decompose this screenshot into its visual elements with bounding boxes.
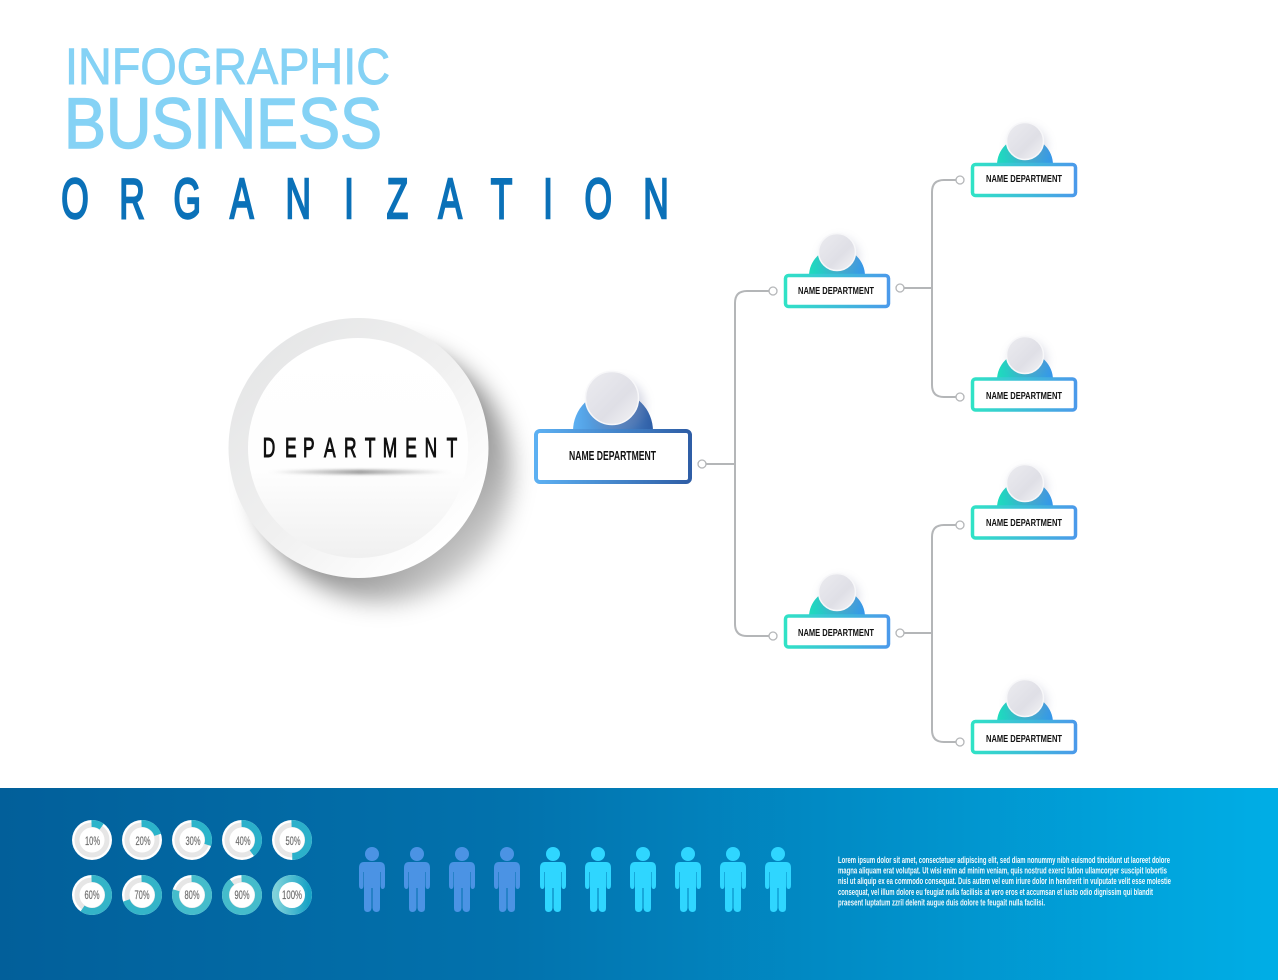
- node: upper middle: [786, 234, 888, 306]
- heading: business: BUSINESS: [64, 85, 382, 164]
- donut 50%: 50%: [286, 834, 301, 848]
- donut 20%: 20%: [136, 834, 151, 848]
- node: right 4: NAME DEPARTMENT: [986, 733, 1062, 745]
- donut 30%: [172, 820, 212, 860]
- person 8: [675, 847, 701, 912]
- percentage donuts: [72, 820, 312, 915]
- donut 70%: [122, 875, 162, 915]
- donut 60%: [72, 875, 112, 915]
- donut 10%: 10%: [85, 834, 100, 848]
- person 6: [585, 847, 611, 912]
- node: lower middle: [786, 574, 888, 647]
- person 3: [449, 847, 475, 912]
- node: right 3: [972, 464, 1076, 538]
- donut 10%: [72, 820, 112, 860]
- person 7: [630, 847, 656, 912]
- main node: [536, 372, 690, 482]
- donut 100%: 100%: [282, 888, 302, 902]
- person 1: [359, 847, 385, 912]
- donut 100%: [272, 875, 312, 915]
- node: upper middle: NAME DEPARTMENT: [798, 285, 874, 297]
- people pictogram: [359, 847, 791, 912]
- node: right 4: [972, 680, 1076, 752]
- bottom band: [0, 788, 1278, 980]
- person 2: [404, 847, 430, 912]
- donut 70%: 70%: [134, 888, 150, 902]
- donut 80%: [172, 875, 212, 915]
- person 9: [720, 847, 746, 912]
- heading: infographic: INFOGRAPHIC: [65, 38, 390, 95]
- node: right 3: NAME DEPARTMENT: [986, 517, 1062, 529]
- node: right 1: NAME DEPARTMENT: [986, 173, 1062, 185]
- donut 40%: 40%: [236, 834, 251, 848]
- donut 80%: 80%: [184, 888, 200, 902]
- donut 20%: [122, 820, 162, 860]
- person 4: [494, 847, 520, 912]
- donut 60%: 60%: [84, 888, 100, 902]
- title: [61, 38, 669, 231]
- donut 90%: 90%: [234, 888, 250, 902]
- connector lines: [698, 176, 964, 746]
- node: right 2: [972, 336, 1076, 410]
- heading: organization: ORGANIZATION: [61, 168, 669, 231]
- department circle: [228, 318, 512, 602]
- person 5: [540, 847, 566, 912]
- main node: NAME DEPARTMENT: [569, 449, 656, 463]
- node: right 2: NAME DEPARTMENT: [986, 390, 1062, 402]
- department label: DEPARTMENT: [263, 432, 457, 463]
- node: lower middle: NAME DEPARTMENT: [798, 627, 874, 639]
- body text: praesent luptatum zzril delenit augue duis dolore te feugait nulla facilisi.: [838, 898, 1045, 908]
- node: right 1: [972, 122, 1076, 196]
- donut 40%: [222, 820, 262, 860]
- person 10: [765, 847, 791, 912]
- donut 90%: [222, 875, 262, 915]
- body text: [838, 855, 1171, 908]
- donut 30%: 30%: [186, 834, 201, 848]
- donut 50%: [272, 820, 312, 860]
